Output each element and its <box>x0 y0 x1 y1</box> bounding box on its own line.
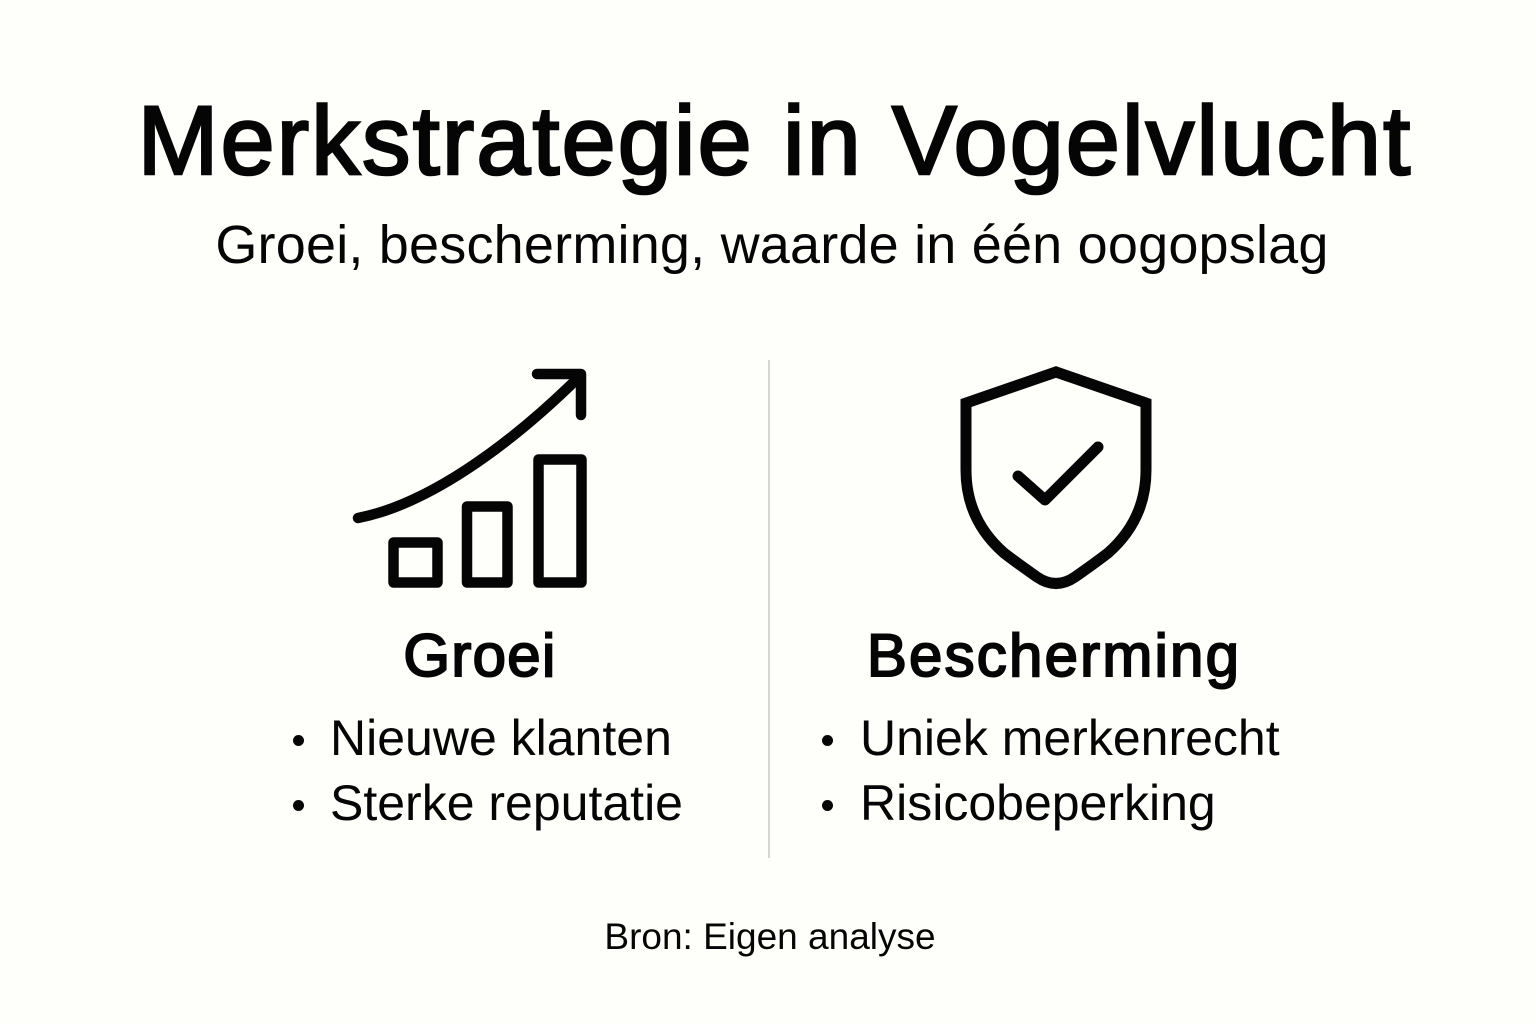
icon: shield with check <box>960 366 1152 590</box>
source note: Bron: Eigen analyse <box>604 916 936 957</box>
heading: Groei: Groei <box>403 622 557 689</box>
bullet text: Risicobeperking: Risicobeperking <box>860 775 1216 831</box>
list: Groei <box>293 710 683 831</box>
title: Merkstrategie in Vogelvlucht <box>138 86 1412 195</box>
divider <box>768 360 770 858</box>
subtitle: Groei, bescherming, waarde in één oogopslag <box>215 215 1329 275</box>
bullet text: Uniek merkenrecht: Uniek merkenrecht <box>860 710 1280 766</box>
bullet text: Sterke reputatie: Sterke reputatie <box>330 775 683 831</box>
list: Bescherming <box>822 710 1280 831</box>
bullet text: Nieuwe klanten: Nieuwe klanten <box>330 710 672 766</box>
icon: growth chart with arrow <box>352 368 587 588</box>
heading: Bescherming: Bescherming <box>867 622 1241 689</box>
